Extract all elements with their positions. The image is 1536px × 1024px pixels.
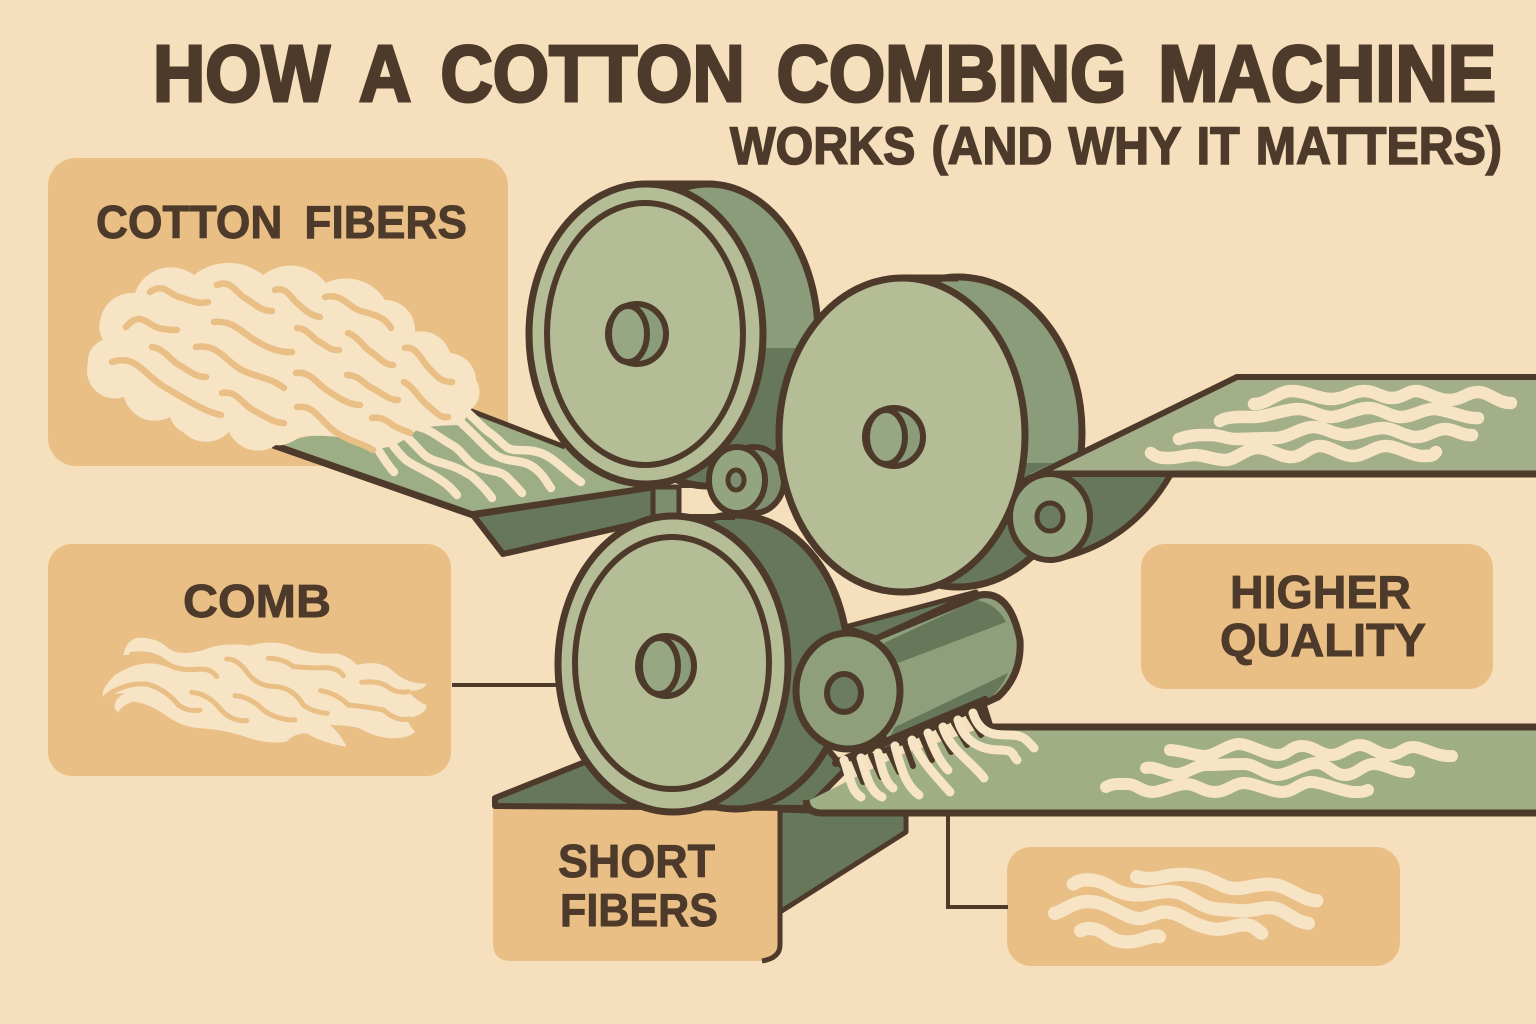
right disc face xyxy=(779,278,1025,592)
right disc hub xyxy=(865,408,923,466)
cylinder shading xyxy=(884,600,1006,663)
support post xyxy=(653,479,710,522)
upper disc body xyxy=(598,184,818,486)
input belt xyxy=(273,402,670,554)
panel: combed sample xyxy=(1007,847,1400,966)
lower belt fibers xyxy=(1106,744,1452,792)
right disc xyxy=(779,277,1082,592)
comb cylinder xyxy=(796,592,1034,797)
upper disc hub xyxy=(608,304,666,364)
lower disc hub xyxy=(638,636,694,696)
comb fiber tuft xyxy=(103,638,427,747)
cotton fibers label: COTTON FIBERS xyxy=(96,196,467,248)
base platform xyxy=(495,740,845,808)
comb label: COMB xyxy=(183,575,331,627)
lower disc body xyxy=(622,515,848,809)
small roller xyxy=(709,447,784,513)
panel: comb xyxy=(48,544,451,776)
upper disc face xyxy=(529,184,763,484)
title xyxy=(153,29,1502,176)
cotton squiggles xyxy=(112,284,452,450)
comb fibers xyxy=(844,713,1034,797)
cotton strands on belt xyxy=(372,400,581,498)
upper belt fibers xyxy=(1151,391,1511,460)
lower output belt xyxy=(806,700,1536,813)
lower support wedge xyxy=(780,810,906,912)
higher quality label: HIGHER xyxy=(1230,566,1411,618)
input belt front lip xyxy=(473,487,670,554)
lower disc face xyxy=(558,516,788,812)
leader lines xyxy=(452,685,1008,907)
short fibers label: SHORT xyxy=(558,835,715,887)
upper disc xyxy=(529,184,818,486)
combed fiber tuft xyxy=(1055,874,1317,942)
output roller xyxy=(1010,474,1171,560)
lower disc xyxy=(558,515,848,812)
panel: higher quality xyxy=(1141,544,1493,689)
comb teeth xyxy=(836,700,991,782)
machine xyxy=(273,184,1536,912)
upper output belt xyxy=(1022,377,1536,482)
panel: short fibers xyxy=(493,807,780,961)
panel: short fibers: FIBERS xyxy=(560,884,718,936)
panel: cotton fibers xyxy=(48,158,508,466)
cotton cloud and fibers xyxy=(87,263,581,498)
right disc body xyxy=(834,277,1082,587)
panel: higher quality: QUALITY xyxy=(1220,614,1426,666)
cylinder end cap xyxy=(796,633,900,749)
